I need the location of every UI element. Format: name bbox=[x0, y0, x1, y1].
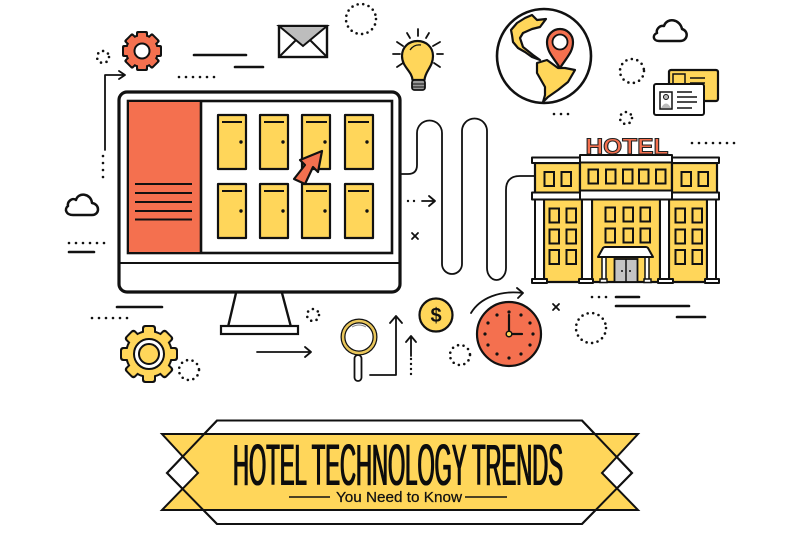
continents bbox=[511, 15, 575, 102]
decorative dashes, left bbox=[69, 243, 319, 321]
icon: ID cards bbox=[654, 70, 718, 115]
banner white backing bbox=[167, 420, 632, 524]
decorative dotted ring near clock bbox=[450, 345, 470, 365]
cursor arrow bbox=[294, 151, 322, 184]
title banner bbox=[162, 420, 638, 524]
icon: envelope bbox=[279, 26, 327, 57]
upper floor bbox=[532, 155, 719, 193]
decorative dashes and cross, lower right bbox=[553, 297, 705, 343]
icon: dollar coin: $ bbox=[430, 305, 442, 327]
icon: red gear bbox=[122, 31, 162, 71]
monitor with room doors bbox=[119, 92, 400, 334]
lower floor bbox=[544, 199, 707, 282]
icon: light bulb bbox=[393, 29, 443, 90]
left arrow up to gear bbox=[105, 71, 125, 150]
arrow to magnifier bbox=[257, 347, 311, 357]
icon: cloud left bbox=[66, 195, 98, 215]
icon: globe with location pin bbox=[497, 9, 591, 103]
icon: dollar coin bbox=[420, 298, 452, 332]
subheading: You Need to Know bbox=[336, 489, 462, 506]
growth arrow bbox=[370, 316, 402, 375]
decorative dotted rings, upper right bbox=[554, 59, 735, 143]
decorative dashes and dots, upper left bbox=[97, 4, 376, 178]
icon: cloud right bbox=[654, 20, 687, 41]
hotel entrance bbox=[598, 247, 653, 282]
location pin bbox=[547, 29, 573, 68]
banner yellow ribbon bbox=[162, 434, 638, 510]
room doors grid bbox=[218, 115, 373, 238]
columns and cornice bbox=[532, 190, 719, 283]
curved arrow above clock bbox=[471, 288, 523, 313]
icon: yellow gear bbox=[120, 325, 178, 383]
connector: winding line from monitor to hotel bbox=[401, 118, 534, 280]
dotted growth arrow bbox=[406, 336, 416, 376]
hotel sign: HOTEL bbox=[586, 134, 668, 159]
hotel building bbox=[532, 134, 719, 283]
icon: clock bbox=[477, 302, 541, 366]
dotted arrow and cross between monitor and hotel bbox=[408, 196, 435, 239]
windows bbox=[544, 170, 708, 264]
decorative dotted ring near gear bbox=[179, 360, 199, 380]
icon: magnifying glass bbox=[343, 321, 375, 381]
banner outline overlay bbox=[167, 420, 632, 524]
